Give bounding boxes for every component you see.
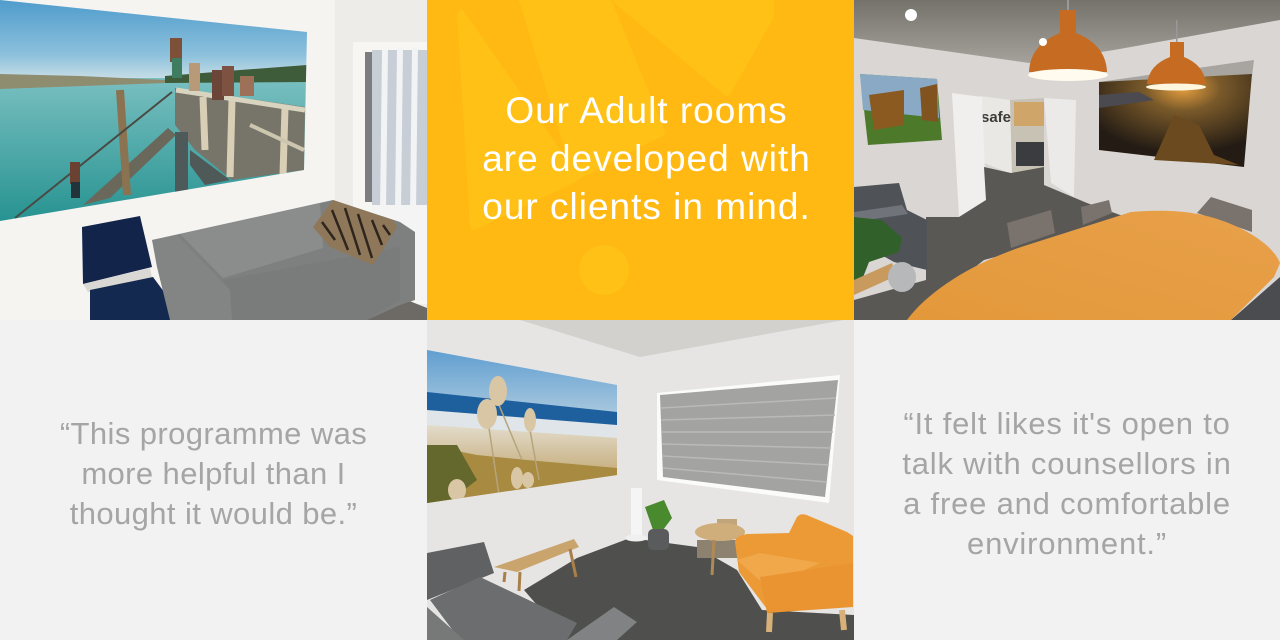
photo: meeting room with table and orange lights <box>854 0 1280 320</box>
table <box>907 211 1280 320</box>
quote text: thought it would be.” <box>70 496 357 531</box>
plant <box>854 217 902 285</box>
quote text <box>902 406 1232 561</box>
window blind <box>657 375 840 503</box>
doorway: safe <box>981 109 1011 126</box>
quote text: a free and comfortable <box>903 486 1231 521</box>
open door <box>952 93 986 217</box>
navy chair <box>82 216 170 320</box>
chairs <box>1007 197 1252 248</box>
carpet <box>524 538 854 640</box>
heading <box>482 90 811 227</box>
pendant lamps <box>1028 0 1206 90</box>
decorative background shapes <box>427 0 854 320</box>
beach artwork <box>427 345 617 510</box>
quote text: more helpful than I <box>81 456 346 491</box>
tower fan <box>625 488 647 542</box>
tiger-print throw <box>313 200 397 265</box>
quote text: “It felt likes it's open to <box>903 406 1231 441</box>
panel: yellow headline <box>427 0 854 320</box>
quote text <box>60 416 367 531</box>
cows artwork <box>860 74 942 145</box>
photo: room with orange armchair and beach artwork <box>427 320 854 640</box>
grey sofa <box>152 200 415 320</box>
plant <box>645 500 672 550</box>
sunset artwork <box>1099 60 1254 167</box>
ceiling lights <box>905 9 1047 46</box>
quote text: talk with counsellors in <box>902 446 1232 481</box>
heading: our clients in mind. <box>482 186 811 227</box>
doorway <box>980 96 1076 197</box>
round side table <box>695 519 745 575</box>
quote text: “This programme was <box>60 416 367 451</box>
heading: Our Adult rooms <box>505 90 788 131</box>
photo: adult room with sofa and jetty artwork <box>0 0 427 320</box>
heading: are developed with <box>482 138 811 179</box>
panel: right quote <box>854 320 1280 640</box>
floor <box>366 300 427 320</box>
coffee table <box>494 539 579 591</box>
panel: left quote <box>0 320 427 640</box>
window with vertical blinds <box>353 42 427 304</box>
orange armchair <box>735 514 853 632</box>
waste bin <box>888 262 916 292</box>
sofa <box>854 183 927 270</box>
quote text: environment.” <box>967 526 1167 561</box>
side table <box>854 263 896 295</box>
carpet <box>854 167 1134 320</box>
grey sofa <box>427 542 637 640</box>
